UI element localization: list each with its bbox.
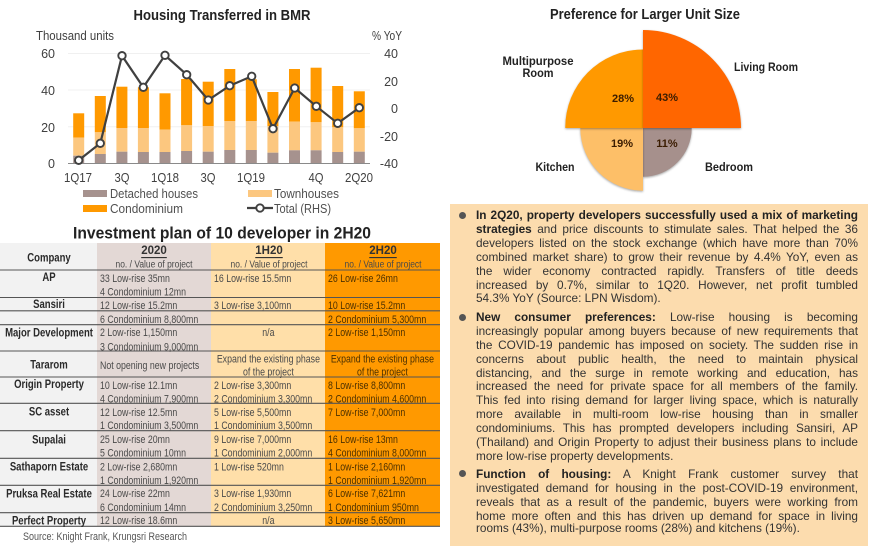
- slice labels: Multipurpose: [502, 54, 574, 68]
- panel: commentary: distancing, and the surge in remote working and education, has: [476, 366, 858, 380]
- panel: commentary: increasingly popular among buyers because of new requirements that: [476, 324, 858, 338]
- source note: Source: Knight Frank, Krungsri Research: [23, 531, 187, 543]
- column 2020: 1 Condominium 1,920mn: [100, 475, 198, 487]
- panel: commentary: the wider economy contracted rapidly. Transfers of title deeds: [476, 264, 858, 278]
- table header: no. / Value of project: [344, 260, 422, 270]
- column 2020: 25 Low-rise 20mn: [100, 434, 170, 446]
- table header: 2020: [141, 245, 167, 257]
- left axis labels: 60: [41, 47, 55, 61]
- column 2020: [100, 273, 199, 527]
- panel: commentary: more low-rise property developments.: [476, 449, 673, 463]
- column 2020: 2 Low-rise 2,680mn: [100, 462, 177, 474]
- slice labels: [502, 54, 798, 174]
- legend: Condominium: [110, 202, 183, 216]
- panel: commentary: 54.3% YoY (Source: LPN Wisdom).: [476, 291, 661, 305]
- company column: [5, 251, 93, 528]
- panel: commentary: combined market share) to grow their revenue by 4.4% YoY, even as: [476, 250, 858, 264]
- right axis labels: [380, 47, 398, 171]
- percent labels: 28%: [612, 93, 634, 105]
- x axis labels: 4Q: [308, 171, 324, 185]
- right axis labels: 0: [391, 102, 398, 116]
- company column: Pruksa Real Estate: [6, 487, 92, 501]
- company column: Sansiri: [33, 298, 65, 312]
- slice: multipurpose room: [565, 49, 643, 128]
- column 1H20: 2 Condominium 3,300mn: [214, 394, 312, 406]
- column 2H20: 1 Low-rise 2,160mn: [328, 462, 405, 474]
- line: total RHS: [75, 52, 363, 164]
- left axis labels: 40: [41, 84, 55, 98]
- chart: housing transferred in BMR: [36, 29, 403, 216]
- company column: Company: [27, 251, 71, 265]
- column 2H20: 26 Low-rise 26mn: [328, 273, 398, 285]
- column 2H20: 8 Low-rise 8,800mn: [328, 380, 405, 392]
- column 2H20: of the project: [357, 366, 408, 379]
- column 2H20: 10 Low-rise 15.2mn: [328, 300, 405, 312]
- bullet 1: [459, 208, 858, 305]
- column 1H20: 5 Low-rise 5,500mn: [214, 407, 291, 419]
- slice: kitchen: [580, 128, 643, 191]
- column 2020: 2 Low-rise 1,150mn: [100, 327, 177, 340]
- table header: no. / Value of project: [230, 260, 308, 270]
- column 2H20: 2 Condominium 5,300mn: [328, 314, 426, 326]
- table header: 1H20: [255, 245, 283, 257]
- right axis labels: 40: [384, 47, 398, 61]
- x axis labels: 3Q: [114, 171, 130, 185]
- panel: commentary: the COVID-19 pandemic has imposed on society. The sudden rise in: [476, 338, 858, 352]
- axis titles: [36, 29, 403, 43]
- bars: townhouses: [73, 121, 365, 156]
- column 1H20: 16 Low-rise 15.5mn: [214, 273, 291, 285]
- panel: commentary: home more often and this has driven up demand for space in living: [476, 509, 858, 523]
- x axis labels: 1Q18: [151, 171, 179, 185]
- table header: no. / Value of project: [116, 260, 193, 270]
- column 2020: 1 Condominium 3,500mn: [100, 420, 198, 432]
- panel: commentary: developers listed on the stock exchange (which have more than 70%: [476, 236, 858, 250]
- x axis labels: [64, 171, 373, 185]
- company column: Perfect Property: [12, 514, 86, 528]
- percent labels: 43%: [656, 92, 678, 104]
- company column: Sathaporn Estate: [10, 460, 88, 474]
- x axis labels: 1Q19: [237, 171, 265, 185]
- panel: commentary: In 2Q20, property developers successfully used a mix of marketing: [476, 208, 858, 222]
- column 2H20: 1 Condominium 1,920mn: [328, 475, 426, 487]
- column 2H20: 4 Condominium 8,000mn: [328, 448, 426, 460]
- axis titles: % YoY: [372, 29, 403, 43]
- panel: commentary: increased the need for private space for all members of the family.: [476, 379, 858, 393]
- panel: commentary: more available in multi-room low-rise housing than in smaller: [476, 407, 858, 421]
- column 2020: 4 Condominium 12mn: [100, 287, 186, 299]
- column 1H20: 9 Low-rise 7,000mn: [214, 434, 291, 446]
- percent labels: 11%: [656, 138, 678, 150]
- column 2H20: 2 Low-rise 1,150mn: [328, 327, 405, 340]
- panel: commentary: [450, 204, 868, 546]
- panel: commentary: Function of housing: A Knight Frank customer survey that: [476, 467, 858, 481]
- bars: condominium: [73, 68, 365, 138]
- left axis labels: [41, 47, 55, 171]
- panel: commentary: reveals that as a result of the pandemic, buyers were working from: [476, 495, 858, 509]
- column 2020: 6 Condominium 8,800mn: [100, 314, 198, 326]
- panel: commentary: condominiums. This has prompted developers including Sansiri, AP: [476, 421, 858, 435]
- bullet 2: [459, 310, 858, 463]
- title: preference for larger unit size: Preference for Larger Unit Size: [550, 7, 740, 23]
- panel: commentary: (Thailand) and Origin Property to adjust their business plans to include: [476, 435, 858, 449]
- legend: Townhouses: [274, 187, 339, 201]
- column 2H20: 2 Condominium 4,600mn: [328, 394, 426, 406]
- column 1H20: 2 Low-rise 3,300mn: [214, 380, 291, 392]
- column 2020: 12 Low-rise 12.5mn: [100, 407, 177, 419]
- company column: Supalai: [32, 433, 66, 447]
- legend: [83, 187, 339, 216]
- company column: Origin Property: [14, 378, 84, 392]
- company column: Tararom: [30, 358, 68, 372]
- column 1H20: 3 Low-rise 3,100mn: [214, 300, 291, 312]
- panel: commentary: This fed into rising demand for larger living space, which is naturally: [476, 393, 858, 407]
- column 2020: 10 Low-rise 12.1mn: [100, 380, 177, 392]
- axis titles: Thousand units: [36, 29, 114, 43]
- company column: SC asset: [29, 405, 70, 419]
- left axis labels: 20: [41, 121, 55, 135]
- table header: [116, 245, 422, 270]
- column 1H20: Expand the existing phase: [217, 354, 320, 366]
- column 2020: 12 Low-rise 18.6mn: [100, 515, 177, 527]
- panel: commentary: investigated demand for housing in the post-COVID-19 environment,: [476, 481, 858, 495]
- bullet 3: [459, 467, 858, 535]
- table: investment plan: [0, 243, 440, 528]
- panel: commentary: New consumer preferences: Low-rise housing is becoming: [476, 310, 858, 324]
- column 1H20: n/a: [262, 327, 275, 340]
- slice labels: Living Room: [734, 60, 798, 74]
- slice: bedroom: [643, 128, 692, 177]
- column 2H20: 6 Low-rise 7,621mn: [328, 488, 405, 500]
- right axis labels: -20: [380, 130, 398, 144]
- column 2020: Not opening new projects: [100, 360, 199, 372]
- x axis labels: 2Q20: [345, 171, 373, 185]
- company column: AP: [42, 271, 56, 285]
- column 2020: 33 Low-rise 35mn: [100, 273, 170, 285]
- percent labels: 19%: [611, 138, 633, 150]
- column 2H20: 3 Low-rise 5,650mn: [328, 515, 405, 527]
- column 2H20: 7 Low-rise 7,000mn: [328, 407, 405, 419]
- column 1H20: 1 Low-rise 520mn: [214, 462, 284, 474]
- table header: 2H20: [369, 245, 397, 257]
- column 2020: 4 Condominium 7,900mn: [100, 394, 198, 406]
- column 2H20: [328, 273, 434, 527]
- chart: rose pie: [502, 30, 798, 191]
- x axis labels: 3Q: [200, 171, 216, 185]
- title: investment plan: Investment plan of 10 developer in 2H20: [73, 224, 371, 242]
- panel: commentary: rooms (43%), multi-purpose rooms (28%) and kitchens (19%).: [476, 521, 800, 535]
- slice: living room: [643, 30, 741, 128]
- bars: detached houses: [73, 150, 365, 163]
- column 1H20: 3 Low-rise 1,930mn: [214, 488, 291, 500]
- column 2020: 5 Condominium 10mn: [100, 448, 186, 460]
- slice labels: Bedroom: [705, 160, 753, 174]
- slice labels: Kitchen: [536, 160, 574, 174]
- legend: Total (RHS): [274, 202, 331, 216]
- column 2020: 3 Condominium 9,000mn: [100, 342, 198, 354]
- percent labels: [611, 92, 678, 150]
- left axis labels: 0: [48, 157, 55, 171]
- column 1H20: of the project: [243, 366, 294, 379]
- column 1H20: 2 Condominium 3,250mn: [214, 502, 312, 514]
- panel: commentary: increased by 0.7%, similar to 1Q20. However, net profit tumbled: [476, 278, 858, 292]
- panel: commentary: strategies and price discounts to stimulate sales. That helped the 36: [476, 222, 858, 236]
- column 2H20: Expand the existing phase: [331, 354, 434, 366]
- column 1H20: 1 Condominium 2,000mn: [214, 448, 312, 460]
- right axis labels: 20: [384, 75, 398, 89]
- column 2020: 12 Low-rise 15.2mn: [100, 300, 177, 312]
- column 2H20: 1 Condominium 950mn: [328, 502, 419, 514]
- x axis labels: 1Q17: [64, 171, 92, 185]
- slice labels: Room: [522, 66, 554, 80]
- title: housing transferred: Housing Transferred in BMR: [134, 8, 311, 24]
- column 2020: 24 Low-rise 22mn: [100, 488, 170, 500]
- column 1H20: 1 Condominium 3,500mn: [214, 420, 312, 432]
- column 2H20: 16 Low-rise 13mn: [328, 434, 398, 446]
- right axis labels: -40: [380, 157, 398, 171]
- column 2020: 6 Condominium 14mn: [100, 502, 186, 514]
- company column: Major Development: [5, 326, 93, 340]
- panel: commentary: concerns about public health, the need to maintain physical: [476, 352, 858, 366]
- legend: Detached houses: [110, 187, 198, 201]
- column 1H20: n/a: [262, 515, 275, 527]
- column 1H20: [214, 273, 320, 527]
